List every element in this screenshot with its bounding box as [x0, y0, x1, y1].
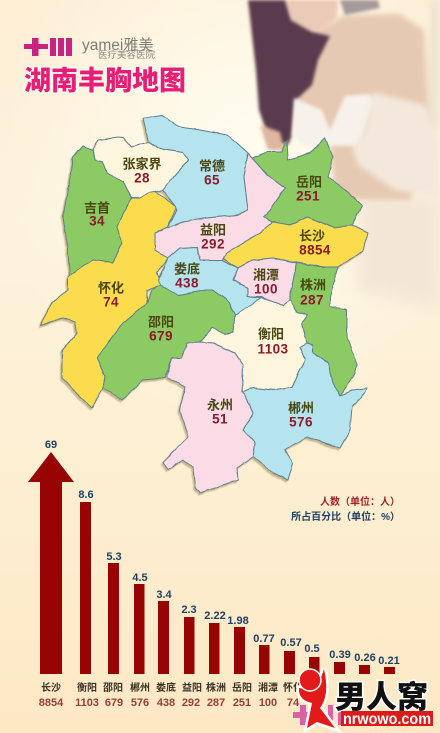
- bar: Xiangtan 0.77: 湘潭: [258, 679, 278, 694]
- region: Loudi: [158, 247, 262, 315]
- label: Xiangtan 100: 100: [254, 282, 278, 296]
- bar: Zhangjiajie 0.21: 0.21: [378, 655, 400, 667]
- label: Changsha 8854: 长沙: [299, 226, 325, 244]
- logo name: yamei雅美: [82, 37, 153, 54]
- label: Yueyang 251: 251: [296, 188, 320, 204]
- logo mark: [24, 38, 72, 56]
- bar: Xiangtan 0.77: 100: [259, 697, 277, 709]
- bar: Shaoyang 5.3: [103, 551, 123, 709]
- bar: Yueyang 1.98: 251: [233, 697, 251, 709]
- bar: Zhuzhou 2.22: 287: [207, 697, 225, 709]
- watermark url: nrwowo.com: [343, 711, 431, 728]
- label: Yiyang 292: [200, 220, 226, 252]
- label: Yiyang 292: 292: [201, 236, 225, 252]
- arrow bar: Changsha 69: 长沙: [41, 679, 61, 694]
- region: Hengyang: [200, 298, 308, 392]
- bar: Yongzhou 0.39: [329, 649, 351, 674]
- label: Changde 65: 常德: [199, 156, 225, 174]
- label: Changsha 8854: [299, 226, 331, 258]
- label: Yongzhou 51: 永州: [207, 394, 233, 414]
- bar: Loudi 3.4: 438: [157, 697, 175, 709]
- bar: Yiyang 2.3: 292: [182, 697, 200, 709]
- label: Hengyang 1103: [258, 324, 289, 356]
- label: Jishou 34: 吉首: [84, 198, 110, 216]
- label: Zhangjiajie 28: 张家界: [122, 154, 162, 172]
- label: Zhangjiajie 28: [122, 154, 162, 186]
- region: Changsha: [223, 217, 368, 268]
- bar: Hengyang 8.6: 8.6: [78, 489, 94, 501]
- bar: Yiyang 2.3: 2.3: [181, 604, 197, 616]
- label: Yiyang 292: 益阳: [200, 220, 226, 238]
- label: Yueyang 251: 岳阳: [296, 172, 322, 190]
- watermark figure icon: [299, 669, 335, 728]
- bar: Changde 0.5: 0.5: [304, 643, 320, 655]
- region shapes: [40, 115, 368, 493]
- label: Hengyang 1103: 衡阳: [258, 324, 284, 342]
- bar: Huaihua 0.57: 怀化: [283, 679, 303, 694]
- label: Xiangtan 100: 湘潭: [253, 264, 279, 284]
- label: Yueyang 251: [296, 172, 322, 204]
- label: Loudi 438: [174, 258, 200, 290]
- arrow bar: Changsha 69: [28, 439, 74, 709]
- label: Shaoyang 679: 679: [149, 328, 173, 344]
- bar: Yueyang 1.98: 岳阳: [232, 679, 252, 694]
- bar: Yongzhou 0.39: 0.39: [329, 649, 351, 661]
- legend: people count: 人数（单位：人）: [320, 495, 400, 508]
- region: Changde: [143, 115, 248, 228]
- bar: Xiangtan 0.77: [253, 633, 278, 709]
- label: Zhuzhou 287: [300, 274, 326, 308]
- label: Hengyang 1103: 1103: [258, 342, 289, 356]
- label: Loudi 438: 438: [175, 276, 199, 290]
- bar: Yueyang 1.98: [227, 615, 252, 709]
- label: Changde 65: 65: [204, 172, 220, 188]
- legend: [291, 495, 400, 523]
- bar: Zhuzhou 2.22: 2.22: [204, 610, 226, 622]
- bar chart: [28, 439, 400, 709]
- bar: Yiyang 2.3: 益阳: [182, 679, 202, 694]
- region: Jishou: [63, 146, 132, 275]
- bar: Loudi 3.4: 娄底: [156, 679, 176, 694]
- region: Yueyang: [252, 138, 362, 228]
- region: Shaoyang: [97, 285, 235, 400]
- region: Chenzhou: [242, 343, 367, 480]
- label: Huaihua 74: 怀化: [98, 278, 124, 296]
- label: Changde 65: [199, 156, 225, 188]
- arrow bar: Changsha 69: 69: [45, 439, 57, 451]
- region: Zhuzhou: [290, 263, 357, 396]
- label: Shaoyang 679: 邵阳: [148, 312, 174, 330]
- region: Xiangtan: [233, 258, 297, 305]
- bar: Yueyang 1.98: 1.98: [227, 615, 249, 627]
- bar: Loudi 3.4: 3.4: [156, 589, 173, 601]
- label: Jishou 34: [84, 198, 110, 228]
- bar: Huaihua 0.57: 0.57: [280, 637, 302, 649]
- bar: Chenzhou 4.5: 4.5: [132, 572, 148, 584]
- bar: Shaoyang 5.3: 邵阳: [103, 679, 123, 694]
- bar: Shaoyang 5.3: 5.3: [106, 551, 122, 563]
- label: Yongzhou 51: [207, 394, 233, 426]
- bar: Xiangtan 0.77: 0.77: [253, 633, 275, 645]
- bar: Jishou 0.26: 0.26: [354, 652, 376, 664]
- label: Zhuzhou 287: 287: [300, 292, 324, 308]
- bar: Hengyang 8.6: 1103: [75, 697, 99, 709]
- label: Shaoyang 679: [148, 312, 174, 344]
- bar: Huaihua 0.57: 74: [287, 697, 300, 709]
- bar: Yiyang 2.3: [181, 604, 202, 709]
- region: Yongzhou: [163, 342, 255, 493]
- decorative photo area, top right: [248, 0, 440, 310]
- watermark name: 男人窝: [335, 672, 428, 717]
- legend: percentage: 所占百分比（单位：%）: [291, 510, 400, 523]
- logo subtitle: 医疗美容医院: [98, 49, 156, 61]
- bar: Zhuzhou 2.22: [204, 610, 226, 709]
- label: Zhangjiajie 28: 28: [134, 170, 150, 186]
- map of Hunan: [40, 115, 368, 493]
- bar: Zhangjiajie 0.21: [378, 655, 400, 674]
- bar: Shaoyang 5.3: 679: [105, 697, 123, 709]
- logo: [24, 37, 156, 61]
- bar: Chenzhou 4.5: 576: [131, 697, 149, 709]
- label: Changsha 8854: 8854: [299, 242, 331, 258]
- faint logo, lower right: [293, 705, 343, 725]
- label: Jishou 34: 34: [89, 214, 105, 228]
- title: 湖南丰胸地图: [24, 59, 186, 98]
- bar: Huaihua 0.57: [280, 637, 303, 709]
- bar: Loudi 3.4: [156, 589, 176, 709]
- arrow bar: Changsha 69: 8854: [39, 697, 64, 709]
- bar: Chenzhou 4.5: [130, 572, 150, 709]
- bar: Changde 0.5: [304, 643, 320, 674]
- label: Huaihua 74: [98, 278, 124, 310]
- label: Huaihua 74: 74: [103, 294, 119, 310]
- bar: Jishou 0.26: [354, 652, 376, 674]
- label: Chenzhou 576: [288, 398, 314, 430]
- bar: Hengyang 8.6: 衡阳: [77, 679, 97, 694]
- label: Xiangtan 100: [253, 264, 279, 296]
- watermark: [299, 669, 433, 728]
- region: Yiyang: [155, 153, 285, 260]
- label: Yongzhou 51: 51: [212, 412, 228, 426]
- label: Loudi 438: 娄底: [174, 258, 200, 278]
- label: Zhuzhou 287: 株洲: [300, 274, 326, 294]
- label: Chenzhou 576: 郴州: [288, 398, 314, 416]
- label: Chenzhou 576: 576: [289, 414, 313, 430]
- bar: Hengyang 8.6: [75, 489, 99, 709]
- region: Zhangjiajie: [93, 137, 188, 198]
- region: Huaihua: [40, 192, 176, 408]
- bar: Zhuzhou 2.22: 株洲: [206, 679, 226, 694]
- bar: Chenzhou 4.5: 郴州: [130, 679, 150, 694]
